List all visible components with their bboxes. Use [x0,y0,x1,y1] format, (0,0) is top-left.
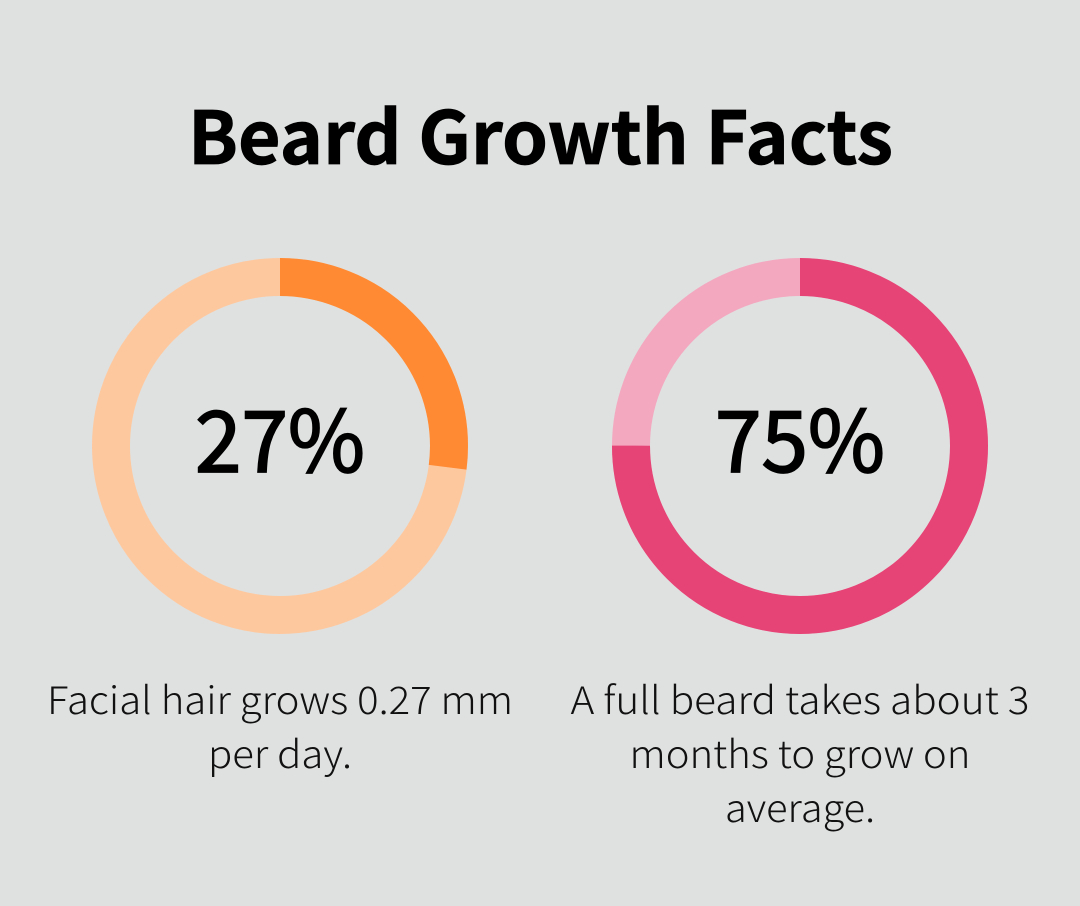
donut chart: 75% [631,277,969,615]
panel: full beard time stat [570,277,1030,833]
panel: facial hair growth stat [47,277,513,779]
caption: full beard: average. [725,778,875,833]
caption: facial hair: Facial hair grows 0.27 mm [47,670,513,725]
value: 75%: 75% [715,374,885,497]
caption: full beard: A full beard takes about 3 [570,670,1030,725]
caption: facial hair: per day. [208,724,352,779]
caption: full beard [570,670,1030,833]
caption: facial hair [47,670,513,779]
title: Beard Growth Facts [188,80,893,186]
value: 27%: 27% [195,374,365,497]
caption: full beard: months to grow on [630,724,970,779]
donut chart: 27% [111,277,449,615]
